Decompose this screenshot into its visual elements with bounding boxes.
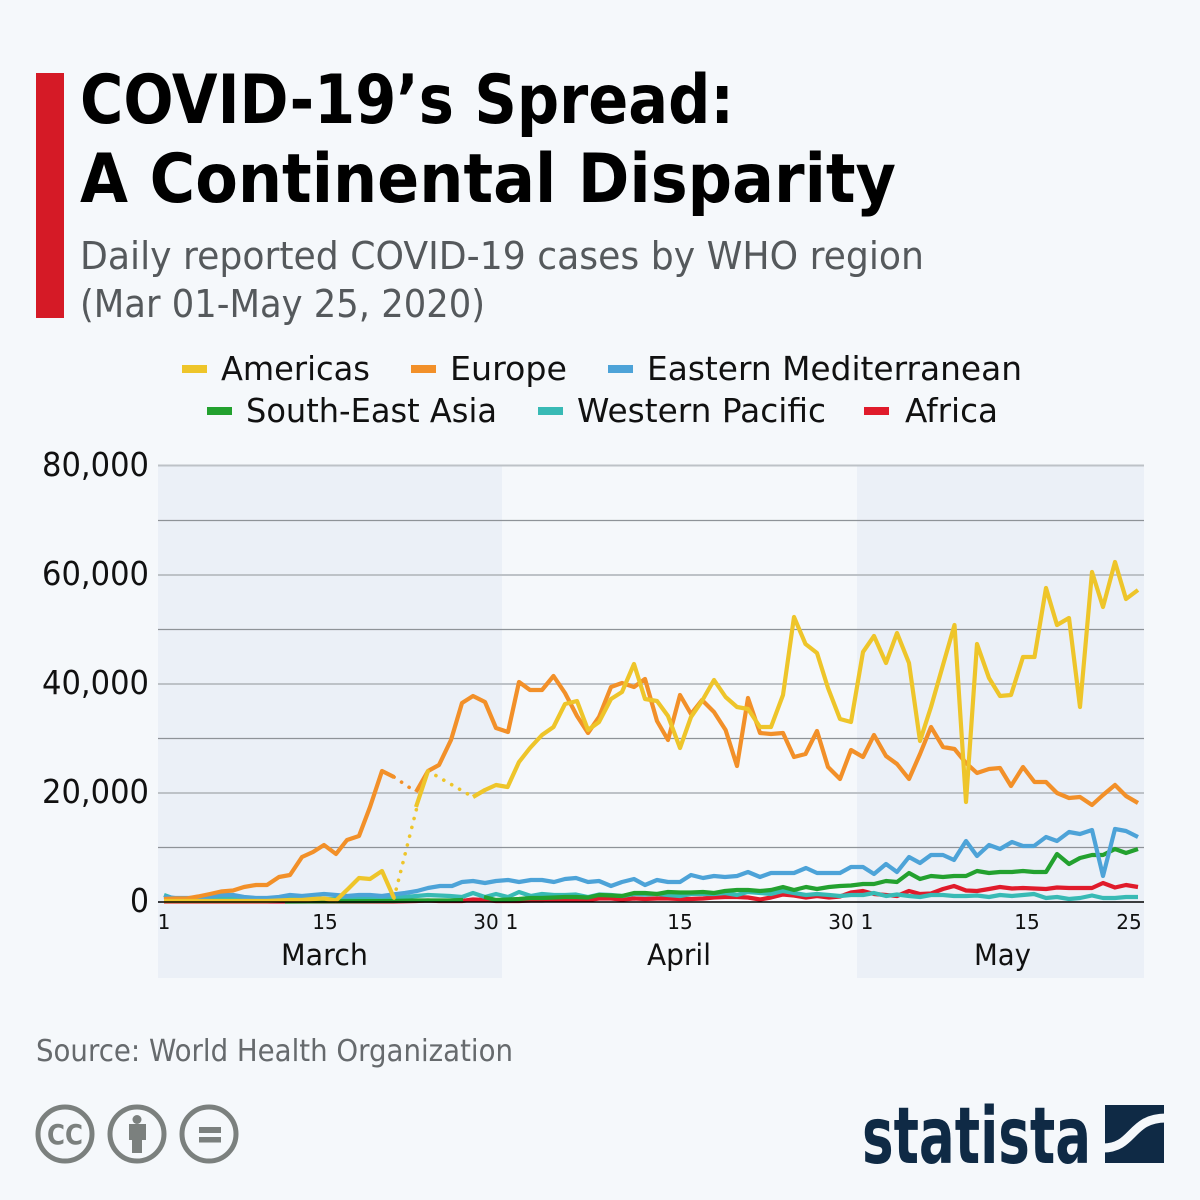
series: South-East Asia	[285, 849, 1138, 902]
x axis day labels	[158, 910, 1142, 934]
legend: Africa: Africa	[905, 391, 998, 430]
subtitle: Daily reported COVID-19 cases by WHO region	[80, 234, 924, 278]
icon: no derivatives	[182, 1107, 236, 1161]
series: Americas	[164, 562, 1138, 901]
subtitle: (Mar 01-May 25, 2020)	[80, 282, 485, 326]
icon: attribution	[110, 1107, 164, 1161]
x axis baseline	[158, 901, 1144, 903]
legend: Western Pacific: Western Pacific	[577, 391, 826, 430]
title: A Continental Disparity	[80, 140, 896, 219]
y axis labels	[42, 445, 149, 920]
source: Source: World Health Organization	[36, 1034, 513, 1069]
legend: Americas: Americas	[221, 349, 370, 388]
x axis day labels: 30	[828, 910, 854, 934]
series: Western Pacific	[164, 891, 1138, 899]
subtitle	[80, 234, 924, 326]
x axis day labels: 1	[506, 910, 518, 934]
title	[80, 61, 896, 219]
icon: creative commons	[38, 1107, 92, 1161]
x axis month labels: May	[974, 938, 1031, 972]
x axis day labels: 15	[1014, 910, 1040, 934]
statista logo mark	[1103, 1105, 1166, 1163]
legend: Europe: Europe	[450, 349, 567, 388]
y axis labels: 60,000	[42, 554, 149, 593]
x axis month labels: March	[281, 938, 368, 972]
y axis labels: 80,000	[42, 445, 149, 484]
x axis day labels: 15	[312, 910, 338, 934]
x axis day labels: 15	[667, 910, 693, 934]
line chart	[164, 562, 1138, 902]
x axis day labels: 30	[473, 910, 499, 934]
y axis labels: 40,000	[42, 663, 149, 702]
red accent bar	[36, 73, 64, 318]
x axis day labels: 1	[861, 910, 873, 934]
x axis day labels: 1	[158, 910, 170, 934]
month band: March	[158, 465, 502, 978]
series: Africa	[164, 883, 1138, 902]
x axis month labels: April	[647, 938, 711, 972]
title: COVID-19’s Spread:	[80, 61, 734, 140]
legend: Africa	[864, 391, 998, 430]
y axis labels: 20,000	[42, 772, 149, 811]
legend: South-East Asia: South-East Asia	[246, 391, 497, 430]
x axis month labels	[281, 938, 1031, 972]
icon: creative commons: CC	[47, 1118, 83, 1151]
series: Europe	[164, 676, 1138, 899]
month band: May	[857, 465, 1144, 978]
x axis day labels: 25	[1116, 910, 1142, 934]
series: Eastern Mediterranean	[164, 829, 1138, 898]
statista wordmark: statista	[862, 1092, 1091, 1182]
legend: Eastern Mediterranean: Eastern Mediterranean	[647, 349, 1022, 388]
y axis labels: 0	[130, 881, 149, 920]
legend	[182, 349, 1022, 430]
